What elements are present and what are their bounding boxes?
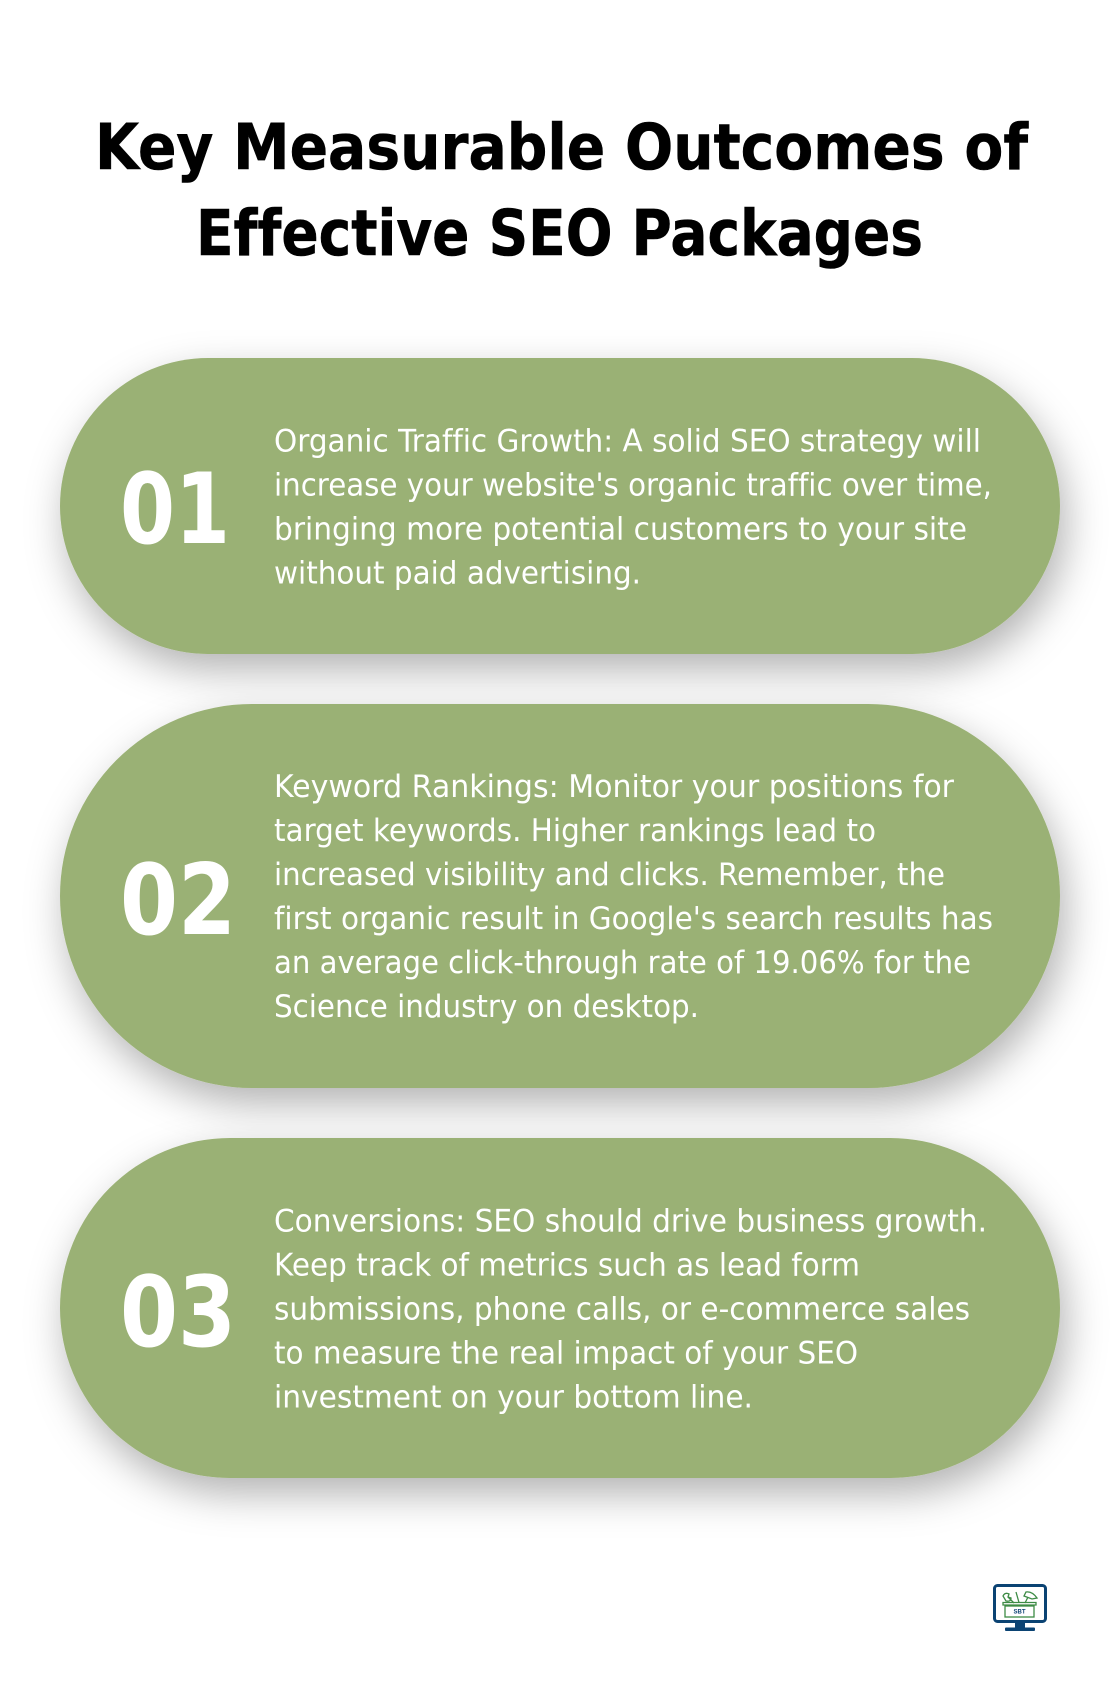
pill background 3 bbox=[60, 1138, 1060, 1478]
body text 2: Keyword Rankings: Monitor your positions for bbox=[274, 769, 954, 805]
body text 1: bringing more potential customers to your site bbox=[274, 512, 967, 548]
body text 3: to measure the real impact of your SEO bbox=[274, 1336, 858, 1372]
panel: conversions bbox=[60, 1138, 1060, 1478]
number 02: 02 bbox=[120, 844, 236, 958]
title: Key Measurable Outcomes of bbox=[95, 111, 1029, 184]
body text 2: an average click-through rate of 19.06% for the bbox=[274, 945, 971, 981]
body text 1: Organic Traffic Growth: A solid SEO strategy will bbox=[274, 424, 981, 460]
panel: keyword rankings bbox=[60, 704, 1060, 1088]
number 03: 03 bbox=[120, 1256, 236, 1370]
body text 2 bbox=[274, 769, 993, 1025]
panel: organic traffic growth bbox=[60, 358, 1060, 654]
icon: monitor with toolbox logo: SBT bbox=[1014, 1610, 1026, 1616]
body text 2: target keywords. Higher rankings lead to bbox=[274, 813, 876, 849]
body text 1: without paid advertising. bbox=[274, 556, 641, 592]
body text 3: Conversions: SEO should drive business growth. bbox=[274, 1204, 987, 1240]
body text 3: submissions, phone calls, or e-commerce sales bbox=[274, 1292, 970, 1328]
title bbox=[95, 111, 1029, 270]
body text 1 bbox=[274, 424, 992, 592]
body text 3: investment on your bottom line. bbox=[274, 1380, 753, 1416]
number 01: 01 bbox=[120, 453, 230, 567]
body text 1: increase your website's organic traffic over time, bbox=[274, 468, 992, 504]
body text 2: first organic result in Google's search results has bbox=[274, 901, 993, 937]
title: Effective SEO Packages bbox=[196, 197, 923, 270]
body text 2: Science industry on desktop. bbox=[274, 989, 699, 1025]
icon: monitor with toolbox logo bbox=[994, 1586, 1046, 1631]
body text 3 bbox=[274, 1204, 987, 1416]
pill background 2 bbox=[60, 704, 1060, 1088]
body text 2: increased visibility and clicks. Remember, the bbox=[274, 857, 945, 893]
body text 3: Keep track of metrics such as lead form bbox=[274, 1248, 860, 1284]
pill background 1 bbox=[60, 358, 1060, 654]
